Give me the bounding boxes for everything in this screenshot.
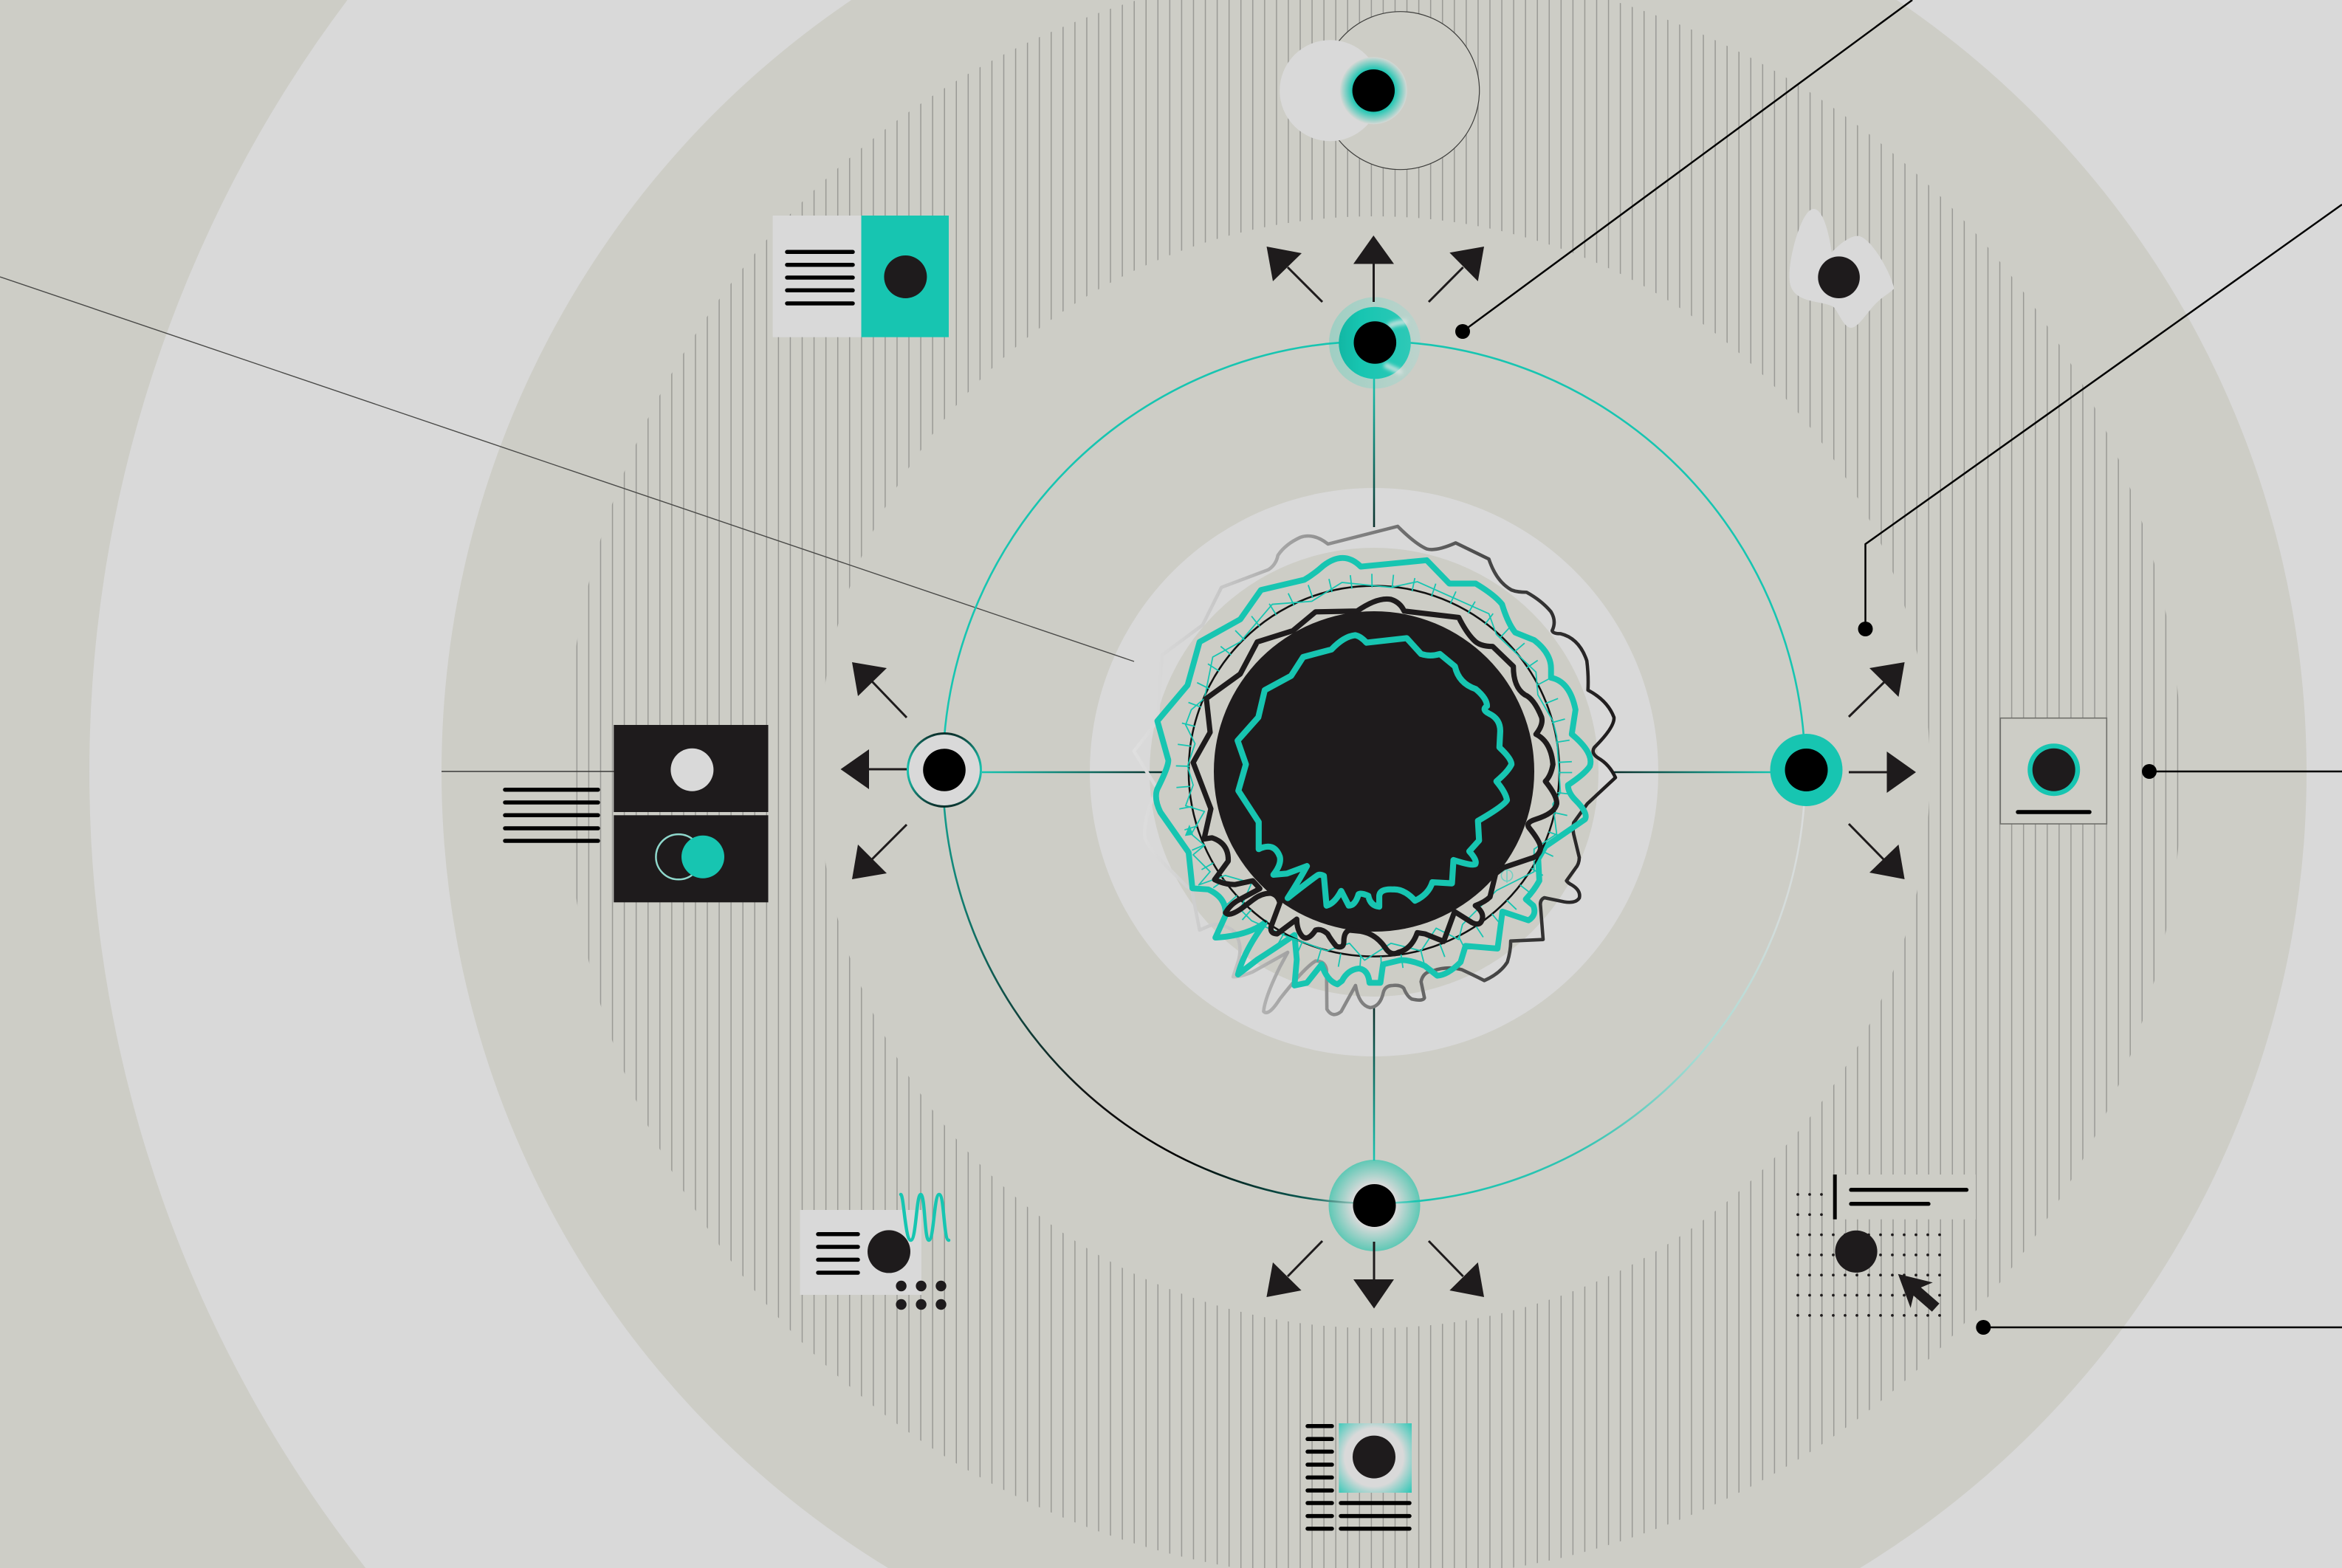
dotted cursor panel bottom right [1792, 1175, 1976, 1325]
black scribble [1193, 599, 1556, 954]
long diagonal thin line left [0, 277, 1134, 661]
callout line bottom right [1976, 1320, 2342, 1335]
thin teal scribble [1186, 582, 1560, 960]
teal tick marks [1183, 580, 1565, 963]
node bottom core [1353, 1184, 1395, 1227]
hatched annulus [566, 0, 2182, 1568]
outer grey scribble [1134, 526, 1615, 1014]
callout line right middle [2142, 764, 2342, 779]
central beige disc [1150, 548, 1598, 997]
axis spokes [982, 378, 1772, 1160]
small teal marks [1185, 825, 1513, 882]
text lines left [505, 790, 598, 841]
callout line right upper [1858, 204, 2342, 636]
box icon right [2000, 718, 2106, 824]
card bottom left with wave and dots [800, 1194, 949, 1310]
halo of top node [1329, 297, 1421, 388]
card left: two dark panels [614, 725, 768, 902]
card top left: text and dot [773, 216, 949, 337]
thick teal scribble [1156, 558, 1590, 986]
node left [908, 734, 981, 806]
horizontal thin line left [442, 771, 614, 772]
arrows bottom [1266, 1241, 1484, 1308]
node top [1339, 307, 1411, 379]
node right [1771, 734, 1843, 806]
arrows top [1267, 235, 1484, 302]
callout line top right [1455, 0, 1912, 339]
arrows left [840, 662, 907, 879]
inner beige disc [442, 0, 2307, 1568]
inner teal scribble [1237, 635, 1511, 907]
central light disc [1090, 488, 1658, 1056]
blob icon top right [1790, 209, 1894, 328]
eclipse icon top [1280, 12, 1480, 170]
arrows right [1849, 662, 1916, 879]
card bottom with gradient [1308, 1423, 1412, 1529]
halo of bottom node [1329, 1160, 1421, 1251]
core dark circle [1214, 611, 1534, 932]
orbit ring [943, 341, 1805, 1203]
thin black ring [1189, 586, 1559, 957]
organic scribble rings [1134, 526, 1615, 1014]
